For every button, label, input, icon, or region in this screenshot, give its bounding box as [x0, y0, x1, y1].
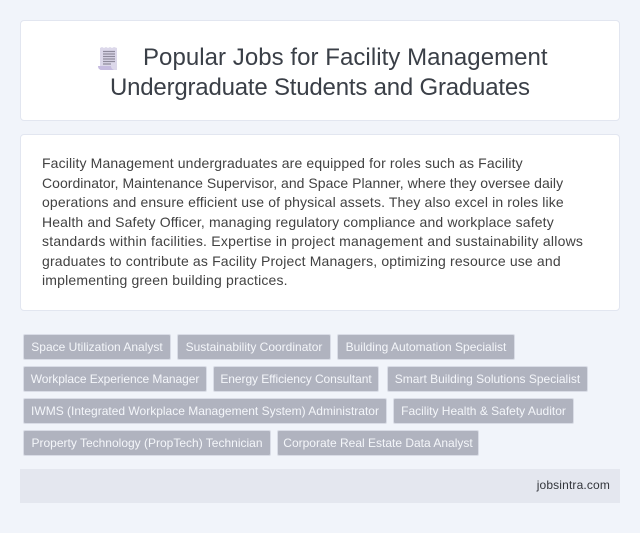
job tags	[23, 334, 588, 456]
text block: description: operations and ensure efficient use of physical assets. They also excel in roles like	[42, 194, 564, 210]
text block: description	[42, 155, 583, 288]
footer source text: jobsintra.com	[537, 478, 610, 492]
tag: Smart Building Solutions Specialist	[395, 372, 580, 386]
text block: description: Coordinator, Maintenance Supervisor, and Space Planner, where they oversee daily	[42, 174, 563, 190]
tag: Property Technology (PropTech) Technician	[31, 436, 263, 450]
text block: description: standards within facilities. Expertise in project management and sustainability allows	[42, 233, 583, 249]
text block: description: Facility Management undergraduates are equipped for roles such as Facility	[42, 155, 523, 171]
title: Popular Jobs for Facility Management	[143, 44, 548, 71]
tag	[177, 334, 331, 360]
tag: Building Automation Specialist	[346, 340, 506, 354]
title	[110, 44, 548, 101]
tag: Energy Efficiency Consultant	[220, 372, 372, 386]
tag: IWMS (Integrated Workplace Management System) Administrator	[31, 404, 379, 418]
tag	[393, 398, 574, 424]
tag: Sustainability Coordinator	[186, 340, 322, 354]
tag	[387, 366, 588, 392]
tag: Facility Health & Safety Auditor	[401, 404, 566, 418]
text block: description: Health and Safety Officer, managing regulatory compliance and workplace safety	[42, 214, 554, 230]
text block: description: implementing green building practices.	[42, 272, 288, 288]
text block: description: graduates to contribute as Facility Project Managers, optimizing resource use and	[42, 252, 561, 268]
title: Undergraduate Students and Graduates	[110, 74, 530, 101]
tag: Corporate Real Estate Data Analyst	[283, 436, 473, 450]
tag	[213, 366, 379, 392]
tag: Workplace Experience Manager	[31, 372, 199, 386]
footer	[20, 469, 620, 503]
panel: description	[20, 134, 620, 311]
tag	[337, 334, 515, 360]
tag: Space Utilization Analyst	[31, 340, 163, 354]
icon: document scroll	[98, 47, 117, 70]
tag	[277, 430, 479, 456]
tag	[23, 398, 387, 424]
tag	[23, 334, 171, 360]
tag	[23, 366, 207, 392]
tag	[23, 430, 271, 456]
panel: header	[20, 20, 620, 121]
